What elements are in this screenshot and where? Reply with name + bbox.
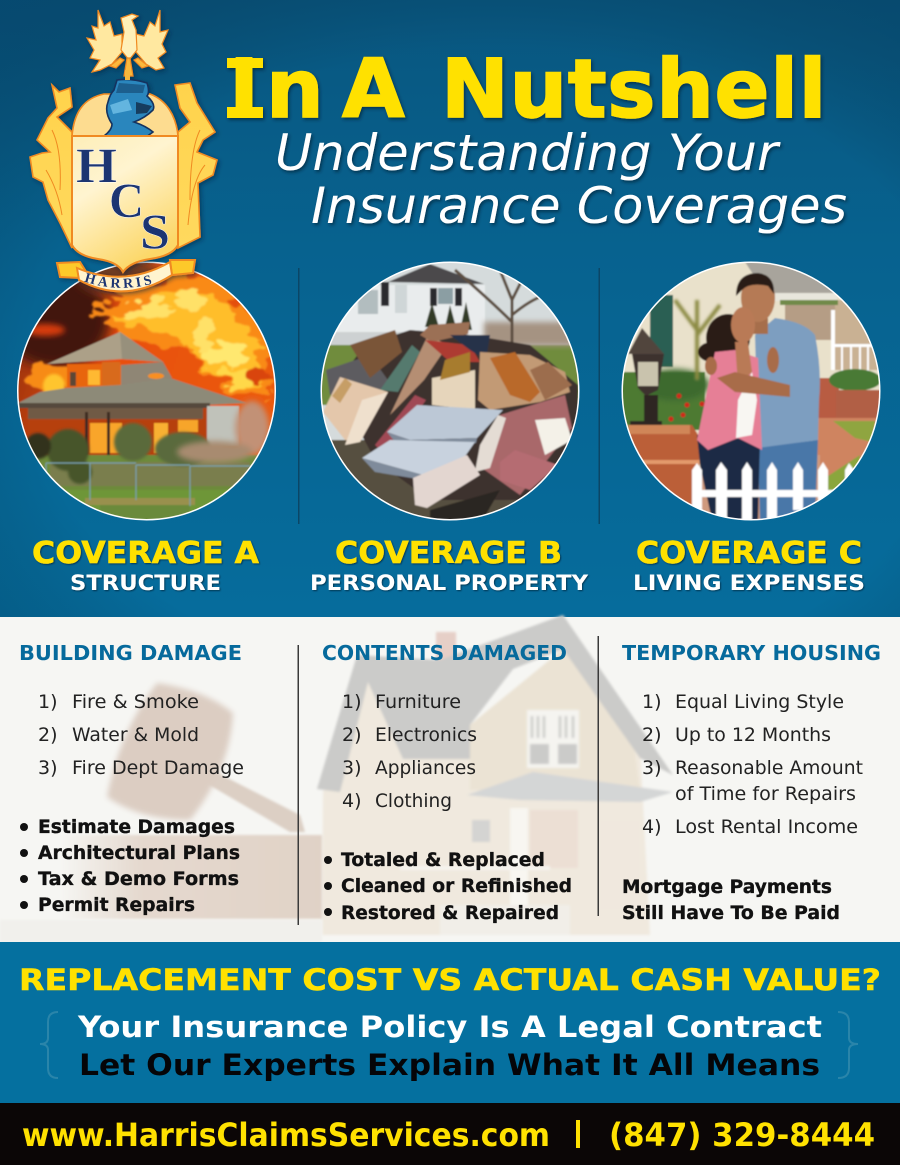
- numbered list: 4): [342, 790, 362, 812]
- numbered list: Appliances: [375, 757, 476, 779]
- icon: knight helmet: [103, 70, 154, 147]
- coverage C heading: COVERAGE C: [636, 536, 862, 571]
- numbered list: 2): [642, 724, 662, 746]
- mortgage note: [622, 876, 840, 924]
- bullet list: [324, 849, 572, 924]
- backdrop: faded house: [317, 615, 673, 935]
- column: building damage: [19, 641, 244, 916]
- numbered list: 1): [38, 691, 58, 713]
- icon: decorative left brace: [40, 1012, 58, 1078]
- bullet list: Tax & Demo Forms: [38, 868, 239, 890]
- panel: call to action band: [0, 942, 900, 1103]
- heading: replacement cost question: REPLACEMENT COST VS ACTUAL CASH VALUE?: [19, 963, 881, 997]
- crest logo: HCS Harris: [29, 10, 221, 298]
- coverage A heading: COVERAGE A: [32, 536, 260, 571]
- ribbon banner: HARRIS: [84, 272, 152, 288]
- numbered list: Fire & Smoke: [72, 691, 199, 713]
- photo circle: pile of damaged furniture: [320, 260, 582, 530]
- column: building damage: BUILDING DAMAGE: [19, 641, 242, 665]
- shield letters: [76, 137, 170, 259]
- column: contents damaged: [322, 641, 572, 924]
- subtitle: Understanding Your: [275, 124, 782, 182]
- woman: [697, 307, 762, 520]
- coverage C heading: [633, 536, 865, 595]
- subtitle: [275, 124, 847, 235]
- numbered list: [38, 691, 244, 779]
- numbered list: 4): [642, 816, 662, 838]
- divider lines: details section: [298, 636, 599, 925]
- background: blue gradient: [0, 0, 900, 617]
- coverage B heading: [310, 536, 589, 595]
- bullet list: [20, 816, 240, 916]
- shield: [72, 136, 178, 272]
- numbered list: 3): [342, 757, 362, 779]
- title: In A Nutshell: [229, 43, 827, 137]
- photo circle: house on fire: [17, 262, 276, 520]
- white picket fence: [690, 461, 854, 519]
- man's arms: [705, 347, 790, 397]
- man: [736, 273, 820, 520]
- numbered list: Furniture: [375, 691, 461, 713]
- photo circle: happy couple at home: [620, 260, 882, 525]
- shield letters: H: [76, 137, 117, 193]
- bullet list: Permit Repairs: [38, 894, 195, 916]
- text: experts line: Let Our Experts Explain What It All Means: [79, 1048, 820, 1082]
- ribbon banner: [56, 259, 200, 298]
- numbered list: 1): [642, 691, 662, 713]
- shield letters: S: [140, 203, 170, 259]
- column: temporary housing: TEMPORARY HOUSING: [622, 641, 881, 665]
- numbered list: Water & Mold: [72, 724, 199, 746]
- column: temporary housing: [622, 641, 881, 924]
- house in background: [330, 264, 485, 348]
- numbered list: 3): [642, 757, 662, 779]
- backdrop: faded gavel: [0, 683, 322, 942]
- numbered list: 2): [342, 724, 362, 746]
- numbered list: 1): [342, 691, 362, 713]
- icon: eagle: [87, 10, 168, 76]
- coverage B heading: PERSONAL PROPERTY: [310, 571, 589, 595]
- numbered list: Up to 12 Months: [675, 724, 831, 746]
- coverage C heading: LIVING EXPENSES: [633, 571, 865, 595]
- numbered list: 3): [38, 757, 58, 779]
- numbered list: Lost Rental Income: [675, 816, 858, 838]
- mortgage note: Still Have To Be Paid: [622, 902, 840, 924]
- divider lines: top section: [298, 268, 600, 524]
- coverage B heading: COVERAGE B: [335, 536, 562, 571]
- numbered list: Equal Living Style: [675, 691, 844, 713]
- numbered list: Electronics: [375, 724, 477, 746]
- mortgage note: Mortgage Payments: [622, 876, 832, 898]
- text: legal contract line: Your Insurance Policy Is A Legal Contract: [77, 1010, 822, 1044]
- bullet list: Architectural Plans: [38, 842, 240, 864]
- bullet list: Estimate Damages: [38, 816, 235, 838]
- bullet list: Totaled & Replaced: [341, 849, 545, 871]
- shield letters: C: [109, 172, 144, 228]
- column: contents damaged: CONTENTS DAMAGED: [322, 641, 567, 665]
- footer: website and phone: (847) 329-8444: [609, 1116, 875, 1154]
- subtitle: Insurance Coverages: [311, 177, 847, 235]
- footer: website and phone: www.HarrisClaimsServices.com: [22, 1116, 550, 1154]
- footer: website and phone: [0, 1103, 900, 1165]
- bullet list: Cleaned or Refinished: [341, 875, 572, 897]
- mantling: gold leaves: [30, 83, 217, 248]
- bullet list: Restored & Repaired: [341, 902, 559, 924]
- brick pillar: [628, 425, 700, 505]
- panel: white details section with faded backdrop: [0, 615, 900, 942]
- numbered list: [342, 691, 477, 812]
- numbered list: [642, 691, 863, 838]
- numbered list: Fire Dept Damage: [72, 757, 244, 779]
- numbered list: Clothing: [375, 790, 452, 812]
- numbered list: 2): [38, 724, 58, 746]
- numbered list: of Time for Repairs: [675, 783, 856, 805]
- numbered list: Reasonable Amount: [675, 757, 863, 779]
- coverage A heading: [32, 536, 260, 595]
- lamp: [628, 328, 664, 426]
- junk pile: [323, 322, 578, 525]
- porch and garden: [700, 310, 882, 525]
- coverage A heading: STRUCTURE: [70, 571, 221, 595]
- icon: decorative right brace: [838, 1012, 858, 1078]
